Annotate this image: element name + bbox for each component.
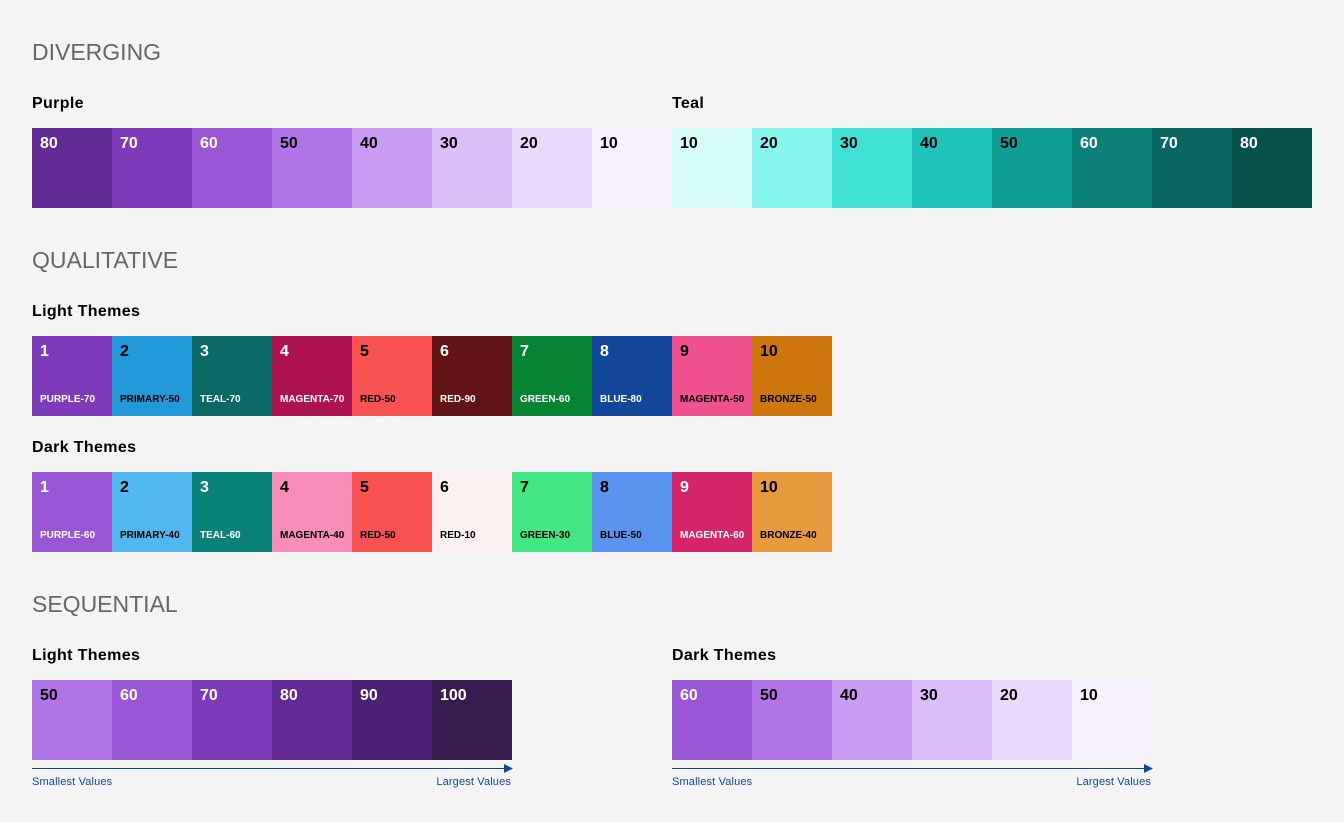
palette: qualitative light themes: BRONZE-50 [760,394,817,405]
subheading: sequential dark themes: Dark Themes [672,647,776,664]
palette: qualitative dark themes: MAGENTA-40 [280,530,344,541]
palette: sequential dark themes: 40 [840,687,858,704]
palette: diverging purple and teal: 30 [840,135,858,152]
subheading: purple: Purple [32,95,84,112]
palette: qualitative light themes: 6 [440,343,449,360]
palette: qualitative dark themes: 7 [520,479,529,496]
palette: qualitative dark themes: 9 [680,479,689,496]
palette: qualitative dark themes: 8 [600,479,609,496]
palette: diverging purple and teal: 60 [1080,135,1098,152]
palette: qualitative light themes: PURPLE-70 [40,394,95,405]
palette: qualitative dark themes: 2 [120,479,129,496]
palette: diverging purple and teal: 20 [520,135,538,152]
palette: qualitative light themes: 3 [200,343,209,360]
subheading: qualitative dark themes: Dark Themes [32,439,136,456]
palette: qualitative light themes: RED-50 [360,394,396,405]
palette: qualitative light themes: 8 [600,343,609,360]
palette: qualitative dark themes: BRONZE-40 [760,530,817,541]
palette: qualitative light themes: 2 [120,343,129,360]
axis arrow: light themes smallest to largest: Smallest Values [32,776,112,788]
palette: diverging purple and teal: 80 [1240,135,1258,152]
palette: qualitative light themes: PRIMARY-50 [120,394,180,405]
subheading: teal: Teal [672,95,704,112]
palette: qualitative dark themes [32,472,832,552]
palette: qualitative dark themes: PRIMARY-40 [120,530,180,541]
palette: sequential dark themes: 50 [760,687,778,704]
palette: qualitative light themes: RED-90 [440,394,476,405]
palette: sequential dark themes: 10 [1080,687,1098,704]
heading: sequential: SEQUENTIAL [32,591,178,617]
palette: diverging purple and teal: 10 [600,135,618,152]
palette: sequential dark themes: 30 [920,687,938,704]
palette: qualitative dark themes: 6 [440,479,449,496]
axis arrow: light themes smallest to largest: Largest Values [436,776,511,788]
heading: diverging: DIVERGING [32,39,161,65]
palette: qualitative dark themes: BLUE-50 [600,530,642,541]
palette: qualitative dark themes: TEAL-60 [200,530,241,541]
palette: qualitative light themes: 4 [280,343,289,360]
heading: qualitative: QUALITATIVE [32,247,178,273]
palette: diverging purple and teal: 40 [920,135,938,152]
palette: qualitative dark themes: GREEN-30 [520,530,570,541]
palette: sequential light themes: 60 [120,687,138,704]
subheading: qualitative light themes: Light Themes [32,303,140,320]
palette: diverging purple and teal: 50 [280,135,298,152]
palette: qualitative light themes: 1 [40,343,49,360]
palette: qualitative dark themes: 3 [200,479,209,496]
palette: diverging purple and teal: 40 [360,135,378,152]
palette: qualitative light themes: 7 [520,343,529,360]
palette: qualitative dark themes: PURPLE-60 [40,530,95,541]
palette: diverging purple and teal [32,128,1312,208]
axis arrow: dark themes smallest to largest: Largest Values [1076,776,1151,788]
palette: qualitative dark themes: 10 [760,479,778,496]
palette: diverging purple and teal: 70 [120,135,138,152]
palette: qualitative dark themes: 5 [360,479,369,496]
palette: qualitative light themes: BLUE-80 [600,394,642,405]
palette: qualitative light themes: 9 [680,343,689,360]
palette: diverging purple and teal: 20 [760,135,778,152]
palette: diverging purple and teal: 50 [1000,135,1018,152]
palette: sequential light themes [32,680,512,760]
palette: diverging purple and teal: 30 [440,135,458,152]
palette: qualitative light themes: TEAL-70 [200,394,241,405]
palette: sequential light themes: 50 [40,687,58,704]
palette: qualitative light themes: 5 [360,343,369,360]
palette: sequential light themes: 100 [440,687,467,704]
palette: diverging purple and teal: 60 [200,135,218,152]
palette: qualitative light themes: MAGENTA-50 [680,394,744,405]
palette: sequential dark themes: 20 [1000,687,1018,704]
palette: sequential light themes: 70 [200,687,218,704]
palette: qualitative dark themes: RED-50 [360,530,396,541]
palette: sequential dark themes: 60 [680,687,698,704]
palette: sequential light themes: 80 [280,687,298,704]
palette: qualitative dark themes: RED-10 [440,530,476,541]
axis arrow: light themes smallest to largest [32,764,513,788]
palette: qualitative light themes: GREEN-60 [520,394,570,405]
palette: qualitative light themes: 10 [760,343,778,360]
axis arrow: dark themes smallest to largest [672,764,1153,788]
palette: qualitative dark themes: MAGENTA-60 [680,530,744,541]
subheading: sequential light themes: Light Themes [32,647,140,664]
palette: diverging purple and teal: 80 [40,135,58,152]
palette: qualitative light themes: MAGENTA-70 [280,394,344,405]
palette: diverging purple and teal: 10 [680,135,698,152]
palette: qualitative dark themes: 4 [280,479,289,496]
palette: sequential light themes: 90 [360,687,378,704]
palette: diverging purple and teal: 70 [1160,135,1178,152]
axis arrow: dark themes smallest to largest: Smallest Values [672,776,752,788]
palette: qualitative light themes [32,336,832,416]
palette: qualitative dark themes: 1 [40,479,49,496]
palette: sequential dark themes [672,680,1152,760]
